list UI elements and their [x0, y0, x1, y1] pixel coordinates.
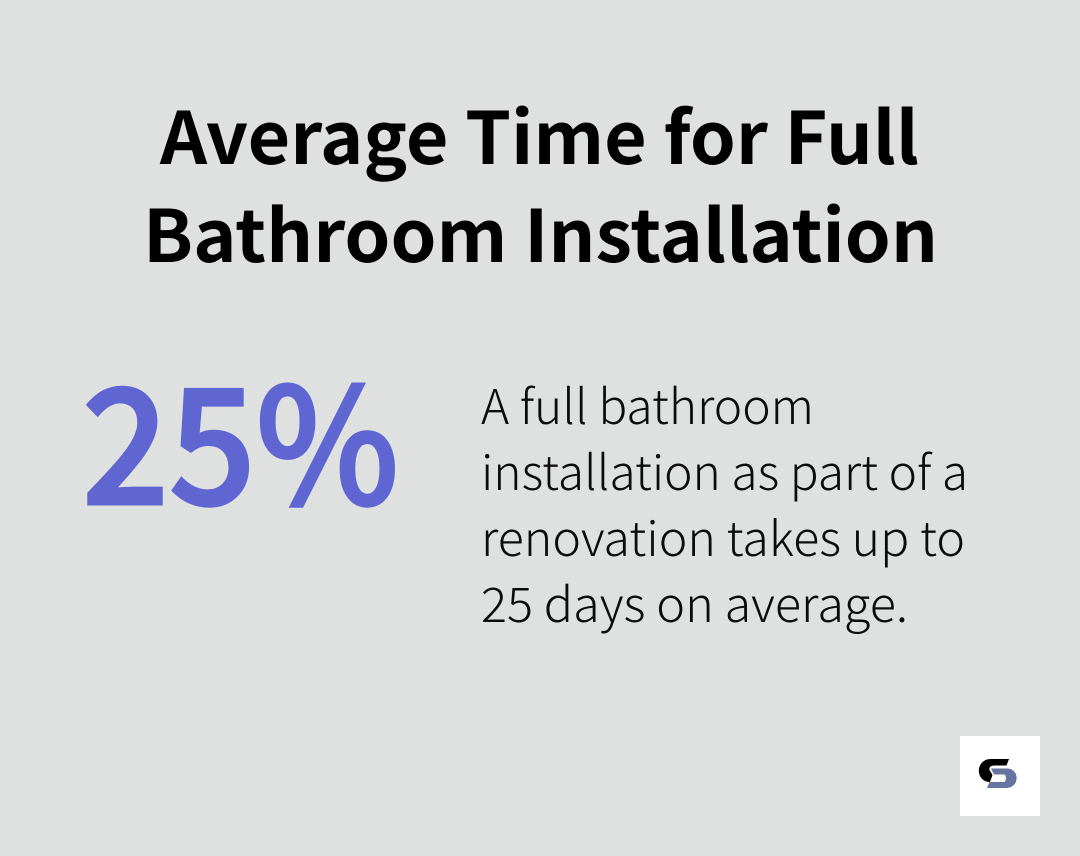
- title: Bathroom Installation: [143, 178, 938, 283]
- title: Average Time for Full: [159, 80, 919, 185]
- description text: installation as part of a: [481, 434, 968, 504]
- description text: [481, 368, 968, 636]
- description text: A full bathroom: [481, 368, 814, 438]
- title: [143, 80, 938, 283]
- description text: 25 days on average.: [481, 566, 908, 636]
- icon: logo mark: [979, 759, 1017, 788]
- logo badge: [960, 736, 1040, 816]
- big statistic: 25%: 25%: [82, 319, 399, 551]
- description text: renovation takes up to: [481, 500, 965, 570]
